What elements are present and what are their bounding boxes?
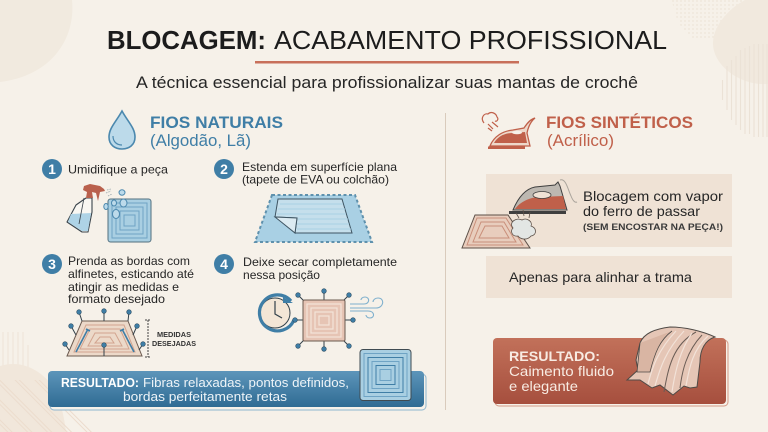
technique text: (SEM ENCOSTAR NA PEÇA!) [583, 222, 723, 233]
icon: spray bottle [67, 184, 112, 232]
result bar: fios naturais: Fibras relaxadas, pontos definidos, [143, 376, 349, 390]
title underline [255, 61, 519, 64]
icon: clock [259, 295, 294, 331]
step 3 text: alfinetes, esticando até [68, 267, 194, 281]
technique text [583, 188, 723, 233]
step 1 badge [42, 159, 62, 179]
technique text: Blocagem com vapor [583, 188, 723, 204]
result box: fios sinteticos: RESULTADO: [509, 348, 600, 364]
background stripes: top right [722, 44, 767, 137]
icon: draped blanket [627, 327, 715, 395]
icon: iron with steam over blanket [462, 180, 577, 248]
icon: finished blue blanket [360, 350, 411, 400]
measure label: DESEJADAS [152, 341, 196, 348]
background blob: top left [0, 0, 72, 82]
subtitle: A técnica essencial para profissionalizar suas mantas de crochê [136, 73, 638, 92]
icon: wind [350, 297, 383, 318]
title [107, 25, 667, 55]
step 1 text: Umidifique a peça [68, 162, 168, 176]
panel: align note [486, 256, 732, 298]
panel: fios sinteticos [462, 113, 732, 406]
step 3 text: Prenda as bordas com [68, 254, 190, 268]
background blob: bottom left [0, 364, 66, 432]
title: ACABAMENTO PROFISSIONAL [274, 25, 667, 55]
result box: fios sinteticos: e elegante [509, 378, 578, 394]
step 2 text [242, 160, 397, 186]
step 3 badge [42, 254, 62, 274]
icon: pinned pink square [293, 289, 355, 351]
step 4 badge [214, 254, 234, 274]
divider [445, 113, 446, 410]
step 1 badge: 1 [48, 161, 56, 177]
technique text: do ferro de passar [583, 203, 700, 219]
background blob: top right [713, 0, 768, 84]
step 2 badge: 2 [220, 161, 228, 177]
step 4 text: nessa posição [243, 268, 320, 282]
icon: water drop [109, 111, 135, 149]
measure line [145, 320, 151, 357]
step 4 text [243, 255, 397, 282]
icon: eva mat with cloth [255, 195, 372, 242]
result bar: fios naturais: RESULTADO: [61, 376, 139, 390]
background stripes: bottom left [3, 332, 28, 375]
icon: pinned blanket [63, 309, 145, 356]
step 4 text: Deixe secar completamente [243, 255, 397, 269]
icon: blue square blanket [104, 190, 151, 242]
measure label [152, 332, 196, 348]
background dots: top right [672, 0, 745, 40]
result box: fios sinteticos: Caimento fluido [509, 363, 614, 379]
result bar: fios naturais [48, 371, 426, 410]
heading: fios sinteticos: FIOS SINTÉTICOS [546, 113, 693, 132]
heading: fios naturais: (Algodão, Lã) [150, 131, 251, 150]
heading: fios sinteticos: (Acrílico) [547, 131, 614, 150]
panel: fios naturais [42, 111, 426, 410]
panel: steam technique [462, 174, 732, 248]
panel: align note: Apenas para alinhar a trama [509, 269, 692, 285]
step 2 text: (tapete de EVA ou colchão) [242, 172, 389, 186]
background hatch: bottom left [0, 380, 95, 432]
step 3 text: formato desejado [68, 292, 165, 306]
heading: fios naturais [150, 113, 283, 150]
icon: steam iron [482, 113, 535, 149]
step 4 badge: 4 [220, 256, 228, 272]
title: BLOCAGEM: [107, 25, 266, 55]
heading: fios sinteticos [546, 113, 693, 150]
result box: fios sinteticos [493, 327, 728, 406]
step 3 badge: 3 [48, 256, 56, 272]
step 3 text [68, 254, 194, 306]
measure label: MEDIDAS [157, 332, 191, 339]
step 2 text: Estenda em superfície plana [242, 160, 397, 174]
step 2 badge [214, 159, 234, 179]
result bar: fios naturais: bordas perfeitamente retas [123, 390, 287, 404]
heading: fios naturais: FIOS NATURAIS [150, 113, 283, 132]
step 3 text: atingir as medidas e [68, 280, 179, 294]
